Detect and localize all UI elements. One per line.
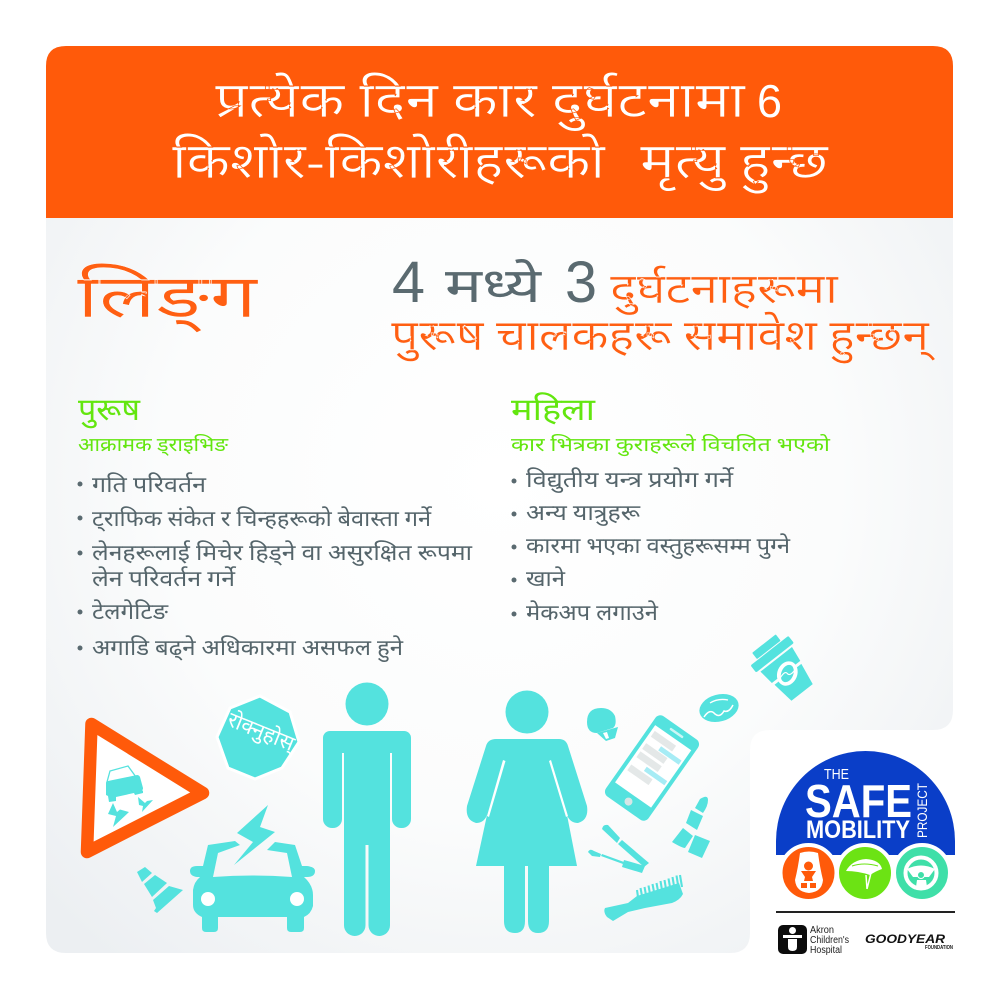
- title banner: मृत्यु हुन्छ: [640, 133, 829, 194]
- bullet list: male behaviours: लेनहरूलाई मिचेर हिड्ने वा असुरक्षित रूपमा: [92, 540, 472, 566]
- bullet list: female behaviours: खाने: [526, 566, 566, 591]
- subheading: distracted inside the car: कार भित्रका कुराहरूले विचलित भएको: [511, 433, 831, 457]
- bullet list: female behaviours: विद्युतीय यन्त्र प्रयोग गर्ने: [526, 467, 735, 493]
- icon: donut: [696, 690, 742, 726]
- bullet list: female behaviours: [512, 467, 791, 625]
- icon: lipstick: [672, 797, 710, 858]
- bullet list: male behaviours: अगाडि बढ्ने अधिकारमा असफल हुने: [92, 635, 404, 662]
- bullet list: male behaviours: गति परिवर्तन: [92, 472, 207, 497]
- icon: traffic cone: [137, 867, 183, 913]
- subheading: aggressive driving: आक्रामक ड्राइभिङ: [78, 433, 229, 456]
- icon: mascara: [588, 825, 649, 873]
- icon: woman figure: [467, 690, 587, 933]
- statistic: 3 in 4 crashes: [391, 250, 936, 364]
- logo: Goodyear Foundation: GOODYEAR: [865, 934, 946, 946]
- logo wordmark: MOBILITY: [806, 816, 910, 844]
- column: female: [511, 392, 831, 625]
- logo wordmark: THE: [824, 766, 849, 783]
- icon: comb: [604, 875, 683, 921]
- bullet list: female behaviours: अन्य यात्रुहरू: [526, 500, 641, 526]
- bullet list: male behaviours: ट्राफिक संकेत र चिन्हहरूको बेवास्ता गर्ने: [92, 506, 433, 532]
- logo: Akron Children's Hospital: Children's: [810, 935, 849, 946]
- heading: male: पुरूष: [78, 392, 141, 429]
- bullet list: male behaviours: [78, 472, 472, 662]
- logo: Akron Children's Hospital: [778, 925, 849, 956]
- icon: stop sign: रोक्नुहोस्: [224, 707, 301, 758]
- statistic: 3 in 4 crashes: दुर्घटनाहरूमा: [610, 265, 839, 316]
- icon: child car seat: [780, 845, 836, 901]
- heading: gender: लिङ्‌ग: [77, 263, 259, 334]
- icon: coffee cup: [745, 629, 821, 707]
- logo blue dome: [776, 751, 955, 855]
- logo wordmark: [805, 766, 930, 844]
- bullet list: male behaviours: टेलगेटिङ: [92, 599, 169, 624]
- statistic: 3 in 4 crashes: पुरूष चालकहरू समावेश हुन्छन्: [391, 311, 936, 364]
- title banner: 6: [757, 75, 782, 127]
- icon: crashed car with lightning: [190, 805, 315, 932]
- icon: man figure: [323, 682, 411, 936]
- bullet list: female behaviours: कारमा भएका वस्तुहरूसम्म पुग्ने: [526, 533, 791, 559]
- title banner: [46, 46, 953, 218]
- logo: Goodyear Foundation: FOUNDATION: [925, 945, 953, 951]
- icon: bicycle helmet: [837, 845, 893, 901]
- logo wordmark: PROJECT: [914, 783, 930, 838]
- icon: smartphone with chat: [603, 713, 701, 823]
- logo: The Safe Mobility Project: [776, 751, 955, 956]
- icon: slippery road warning triangle: [87, 724, 203, 852]
- statistic: 3 in 4 crashes: 4: [392, 250, 425, 315]
- icon: steering wheel: [894, 845, 950, 901]
- heading: female: महिला: [511, 392, 596, 427]
- column: male: [78, 392, 472, 662]
- icon: muffin: [587, 708, 618, 741]
- bullet list: male behaviours: लेन परिवर्तन गर्ने: [92, 566, 237, 591]
- title banner: प्रत्येक दिन कार दुर्घटनामा: [215, 72, 746, 132]
- logo: Goodyear Foundation: [865, 934, 953, 951]
- icon: stop sign: [217, 696, 301, 779]
- statistic: 3 in 4 crashes: मध्ये: [445, 258, 542, 313]
- divider line: [776, 911, 955, 913]
- statistic: 3 in 4 crashes: 3: [565, 250, 597, 315]
- title banner: किशोर-किशोरीहरूको: [172, 133, 606, 189]
- logo wordmark: SAFE: [805, 775, 912, 827]
- logo: Akron Children's Hospital: Hospital: [810, 945, 842, 956]
- logo: Akron Children's Hospital: Akron: [810, 925, 834, 936]
- bullet list: female behaviours: मेकअप लगाउने: [526, 600, 659, 625]
